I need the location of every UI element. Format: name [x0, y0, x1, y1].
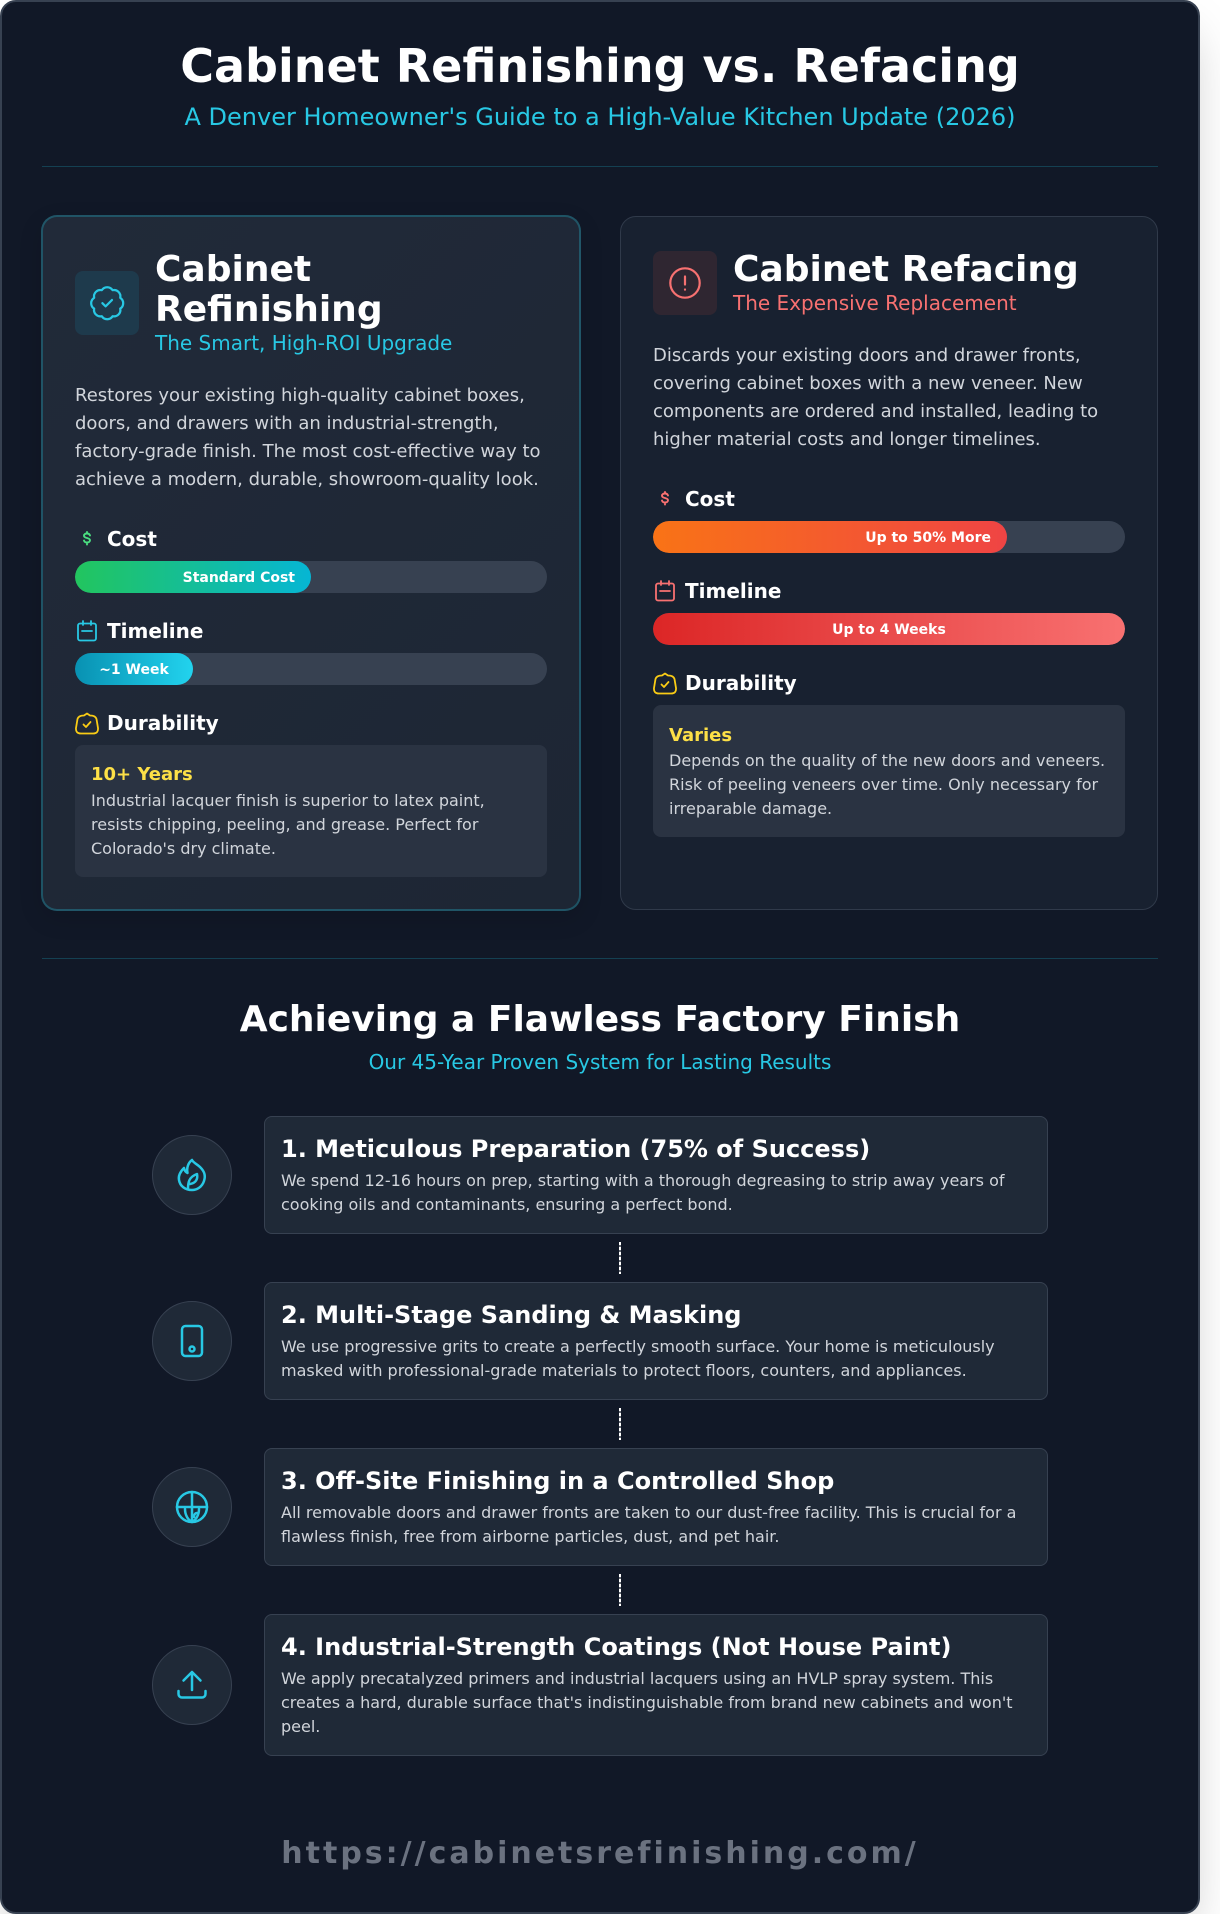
heading: [155, 249, 383, 330]
section subtitle: Our 45-Year Proven System for Lasting Results: [369, 1050, 831, 1074]
description: doors, and drawers with an industrial-strength,: [75, 413, 499, 434]
description: higher material costs and longer timelines.: [653, 429, 1041, 450]
header: [180, 39, 1020, 131]
description: covering cabinet boxes with a new veneer. New: [653, 373, 1083, 394]
step text: masked with professional-grade materials to protect floors, counters, and appliances.: [281, 1361, 967, 1380]
step 4: [152, 1614, 1048, 1756]
step title: 2. Multi-Stage Sanding & Masking: [281, 1301, 742, 1329]
step 2: [152, 1282, 1048, 1400]
bar fill: one week: [75, 653, 193, 685]
icon: upload: [152, 1645, 232, 1725]
bar fill: up to 50 percent more: Up to 50% More: [865, 530, 991, 546]
step text: We use progressive grits to create a perfectly smooth surface. Your home is meticulously: [281, 1337, 995, 1356]
panel: cabinet refacing: [620, 216, 1158, 910]
description: [75, 385, 541, 490]
description: achieve a modern, durable, showroom-quality look.: [75, 469, 539, 490]
step text: [281, 1669, 1013, 1736]
durability text: [669, 751, 1105, 818]
step title: 3. Off-Site Finishing in a Controlled Shop: [281, 1467, 834, 1495]
heading: Cabinet Refacing: [733, 249, 1079, 290]
description: Discards your existing doors and drawer fronts,: [653, 345, 1081, 366]
durability detail box: [653, 705, 1125, 837]
step text: flawless finish, free from airborne particles, dust, and pet hair.: [281, 1527, 779, 1546]
heading: Refinishing: [155, 289, 383, 330]
subtitle: A Denver Homeowner's Guide to a High-Value Kitchen Update (2026): [184, 103, 1016, 131]
step text: All removable doors and drawer fronts are taken to our dust-free facility. This is crucial for a: [281, 1503, 1016, 1522]
step text: We apply precatalyzed primers and industrial lacquers using an HVLP spray system. This: [281, 1669, 993, 1688]
icon: flame: [152, 1135, 232, 1215]
description: Restores your existing high-quality cabinet boxes,: [75, 385, 525, 406]
step card: [264, 1282, 1048, 1400]
label: timeline: Timeline: [107, 619, 203, 643]
durability text: Colorado's dry climate.: [91, 839, 276, 858]
description: components are ordered and installed, leading to: [653, 401, 1098, 422]
cost bar: [653, 521, 1125, 553]
bar fill: up to 50 percent more: [653, 521, 1007, 553]
step 3: [152, 1448, 1048, 1566]
durability value: Varies: [669, 725, 732, 746]
timeline bar: [653, 613, 1125, 645]
step text: [281, 1503, 1016, 1546]
durability detail box: [75, 745, 547, 877]
durability text: resists chipping, peeling, and grease. Perfect for: [91, 815, 478, 834]
icon: calendar: [655, 580, 675, 602]
durability text: Industrial lacquer finish is superior to latex paint,: [91, 791, 485, 810]
durability value: 10+ Years: [91, 764, 193, 785]
icon: dollar: [661, 491, 669, 506]
bar fill: one week: ~1 Week: [99, 662, 169, 678]
step text: [281, 1171, 1005, 1214]
icon: durability: [75, 712, 99, 734]
panel: cabinet refinishing: [41, 215, 581, 911]
label: timeline: Timeline: [685, 579, 781, 603]
step text: cooking oils and contaminants, ensuring a perfect bond.: [281, 1195, 733, 1214]
cost bar: [75, 561, 547, 593]
timeline bar: [75, 653, 547, 685]
title: Cabinet Refinishing vs. Refacing: [180, 39, 1020, 93]
step 1: [152, 1116, 1048, 1234]
bar fill: up to 4 weeks: [653, 613, 1125, 645]
step card: [264, 1448, 1048, 1566]
step text: peel.: [281, 1717, 320, 1736]
footer url: https://cabinetsrefinishing.com/: [281, 1836, 919, 1871]
step title: 4. Industrial-Strength Coatings (Not House Paint): [281, 1633, 951, 1661]
icon: badge check: [75, 271, 139, 335]
label: cost: Cost: [107, 527, 157, 551]
step text: creates a hard, durable surface that's indistinguishable from brand new cabinets and won't: [281, 1693, 1013, 1712]
description: factory-grade finish. The most cost-effective way to: [75, 441, 541, 462]
tagline: The Expensive Replacement: [733, 291, 1017, 315]
label: durability: Durability: [107, 711, 219, 735]
heading: Cabinet: [155, 249, 311, 290]
bar fill: standard cost: Standard Cost: [183, 570, 295, 586]
step card: [264, 1116, 1048, 1234]
section title: Achieving a Flawless Factory Finish: [240, 999, 960, 1040]
step text: We spend 12-16 hours on prep, starting with a thorough degreasing to strip away years of: [281, 1171, 1005, 1190]
bar fill: up to 4 weeks: Up to 4 Weeks: [832, 622, 946, 638]
step title: 1. Meticulous Preparation (75% of Success): [281, 1135, 870, 1163]
tagline: The Smart, High-ROI Upgrade: [155, 331, 452, 355]
durability text: Risk of peeling veneers over time. Only necessary for: [669, 775, 1098, 794]
icon: calendar: [77, 620, 97, 642]
label: durability: Durability: [685, 671, 797, 695]
durability text: Depends on the quality of the new doors and veneers.: [669, 751, 1105, 770]
icon: globe: [152, 1467, 232, 1547]
bar fill: standard cost: [75, 561, 311, 593]
durability text: [91, 791, 485, 858]
icon: dollar: [83, 531, 91, 546]
icon: phone: [152, 1301, 232, 1381]
section heading: [240, 999, 960, 1074]
step text: [281, 1337, 995, 1380]
label: cost: Cost: [685, 487, 735, 511]
description: [653, 345, 1098, 450]
durability text: irreparable damage.: [669, 799, 832, 818]
icon: durability: [653, 672, 677, 694]
icon: alert: [653, 251, 717, 315]
step card: [264, 1614, 1048, 1756]
